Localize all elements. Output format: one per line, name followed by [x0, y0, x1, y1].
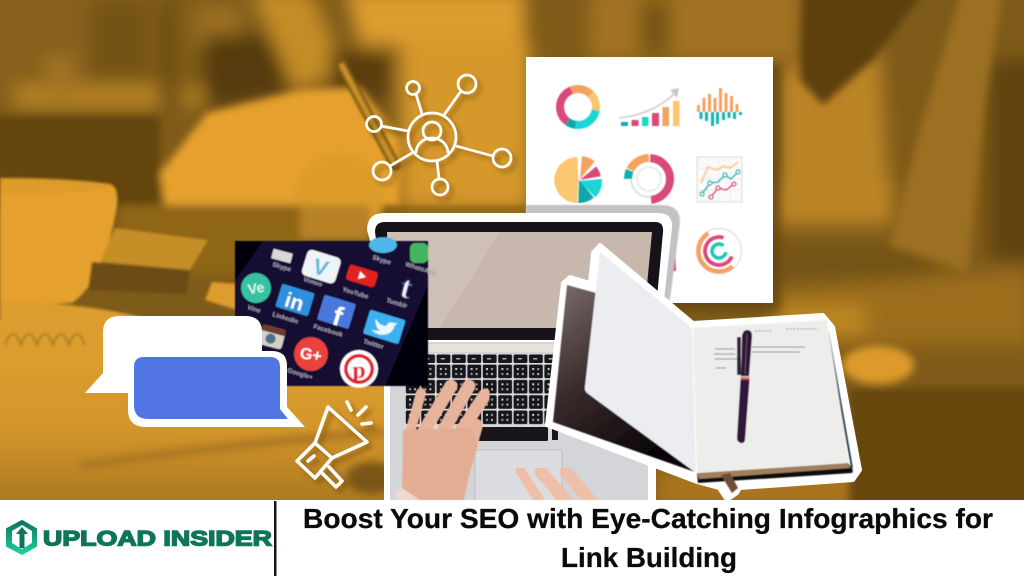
- icon: network person: [366, 75, 511, 195]
- app labels: Vimeo: [302, 276, 323, 289]
- chart: multi-line grid: [697, 157, 742, 202]
- app: google plus: [294, 337, 328, 371]
- app: tumblr: t: [397, 268, 417, 306]
- app: facebook: f: [329, 301, 347, 332]
- logo text: UPLOAD INSIDER: [43, 526, 273, 550]
- pen held in hand: [341, 64, 395, 165]
- hand on keyboard: [395, 386, 485, 500]
- app: windows: [271, 249, 293, 263]
- bookmark: [721, 473, 738, 493]
- right page: [693, 320, 849, 473]
- sticker outline: [547, 245, 860, 500]
- app: pinterest: p: [352, 358, 366, 384]
- pen: [737, 330, 752, 443]
- laptop frame: [367, 213, 672, 345]
- bottom cover: [697, 463, 853, 483]
- trackpad: [475, 450, 562, 505]
- inside cover: [553, 285, 695, 472]
- panel: open notebook with pen: [547, 245, 860, 500]
- speech bubble: white: [85, 316, 262, 393]
- spiral notebook: [0, 303, 145, 352]
- app: facebook: [315, 295, 356, 335]
- app labels: Facebook: [312, 323, 344, 339]
- chart: ring: [621, 151, 677, 207]
- title: [303, 503, 993, 573]
- app: youtube: [345, 264, 379, 288]
- app: instagram: [258, 324, 286, 350]
- hand on trackpad: [520, 470, 592, 503]
- app: vine: [241, 273, 271, 303]
- chart: pie: [554, 156, 602, 203]
- chart: waveform bars: [697, 88, 742, 126]
- left page: [585, 252, 696, 473]
- app: twitter: [363, 310, 406, 344]
- handwriting: [714, 329, 818, 368]
- divider: [274, 501, 276, 576]
- app labels: WhatsApp: [404, 261, 437, 277]
- app: skype top: [369, 237, 397, 253]
- app: vimeo: V: [310, 253, 332, 282]
- app: linkedin: in: [282, 289, 307, 316]
- app labels: Skype: [371, 254, 392, 267]
- speech bubble: blue: [128, 351, 305, 427]
- app labels: Tumblr: [385, 297, 409, 310]
- chart: growth bars with arrow: [619, 88, 680, 126]
- panel: chart card: [526, 57, 781, 311]
- chart: donut: [553, 82, 603, 132]
- app: linkedin: [275, 284, 315, 318]
- grey shadow behind laptop: [526, 205, 680, 300]
- chart fragment: pink sliver: [667, 238, 676, 271]
- app labels: Google+: [286, 367, 314, 382]
- app labels: Skype: [271, 261, 292, 274]
- app labels: LinkedIn: [271, 311, 299, 326]
- app labels: YouTube: [341, 286, 369, 301]
- phone edges: [235, 241, 263, 280]
- app: whatsapp: [410, 243, 428, 263]
- chart: radial: [690, 222, 748, 280]
- lower desk area: [0, 320, 400, 500]
- panel: social media phone photo: [235, 237, 437, 388]
- icon: upload hexagon: [7, 521, 36, 554]
- app labels: Twitter: [362, 338, 385, 351]
- app: pinterest: [340, 350, 378, 388]
- footer panel: [0, 500, 1024, 576]
- coffee cup: [0, 178, 117, 306]
- title: Boost Your SEO with Eye-Catching Infographics for: [303, 503, 993, 534]
- keyboard: [405, 354, 559, 441]
- app labels: [246, 254, 437, 382]
- book on desk: [100, 228, 208, 270]
- laptop base: [384, 340, 656, 500]
- soft shadow left of card: [385, 205, 526, 215]
- title: Link Building: [561, 542, 737, 573]
- laptop: [367, 205, 680, 505]
- app: google plus: G+: [299, 345, 323, 366]
- icon: megaphone: [297, 402, 371, 487]
- paper: [205, 282, 240, 311]
- app: vine: Ve: [247, 279, 266, 297]
- app: vimeo: [301, 249, 342, 285]
- logo: [7, 521, 273, 554]
- app labels: Vine: [246, 304, 262, 315]
- laptop screen: [375, 222, 663, 342]
